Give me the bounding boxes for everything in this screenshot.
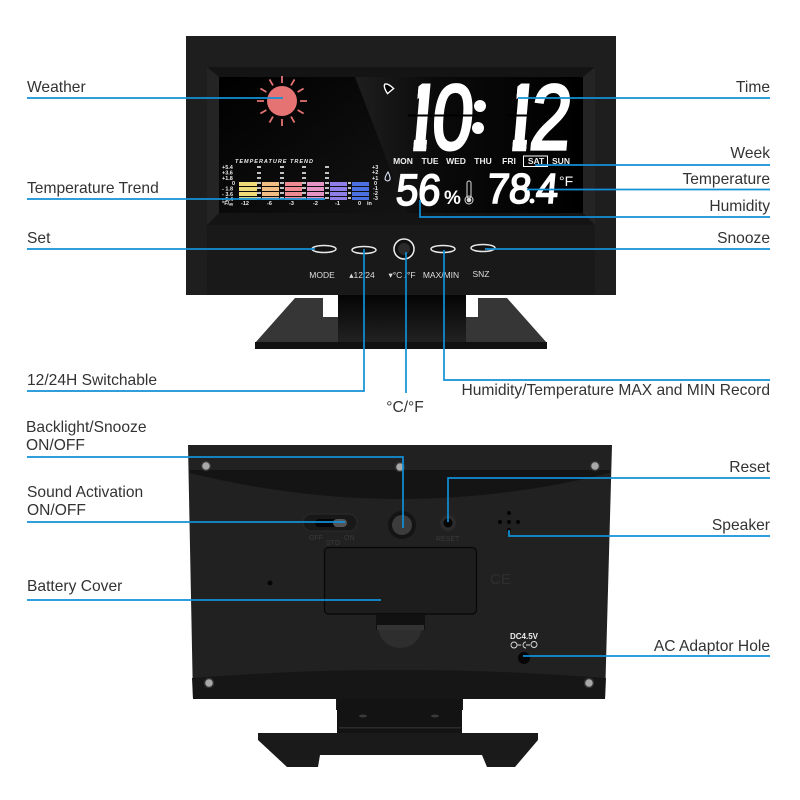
humidity reading: 5 xyxy=(394,166,421,214)
sound activation switch: OFF xyxy=(309,535,323,542)
week days: MON xyxy=(393,156,413,166)
stand: front view xyxy=(255,295,547,349)
reset hole xyxy=(436,515,460,543)
time digits xyxy=(408,83,570,152)
temperature trend chart: - 1.8 xyxy=(222,186,233,192)
icon: sun xyxy=(257,76,307,126)
rear screws xyxy=(202,462,600,688)
temperature reading xyxy=(485,165,573,212)
temperature trend chart: -6 xyxy=(267,201,272,207)
time digits: 1 xyxy=(396,65,446,169)
button captions: ▾°C /°F xyxy=(388,270,416,280)
time digits: 0 xyxy=(428,65,478,169)
button captions: MAX/MIN xyxy=(423,270,459,280)
sound activation switch: STD xyxy=(326,540,340,547)
callout: °C/°F: °C/°F xyxy=(386,399,424,416)
DC power marking xyxy=(510,632,539,648)
callout: Humidity/Temperature MAX and MIN Record: Humidity/Temperature MAX and MIN Record xyxy=(461,382,770,399)
callout: Temperature: Temperature xyxy=(682,171,770,188)
AC adaptor hole xyxy=(518,652,530,664)
temperature trend chart: +1.8 xyxy=(222,176,233,182)
temperature trend chart: +2 xyxy=(372,170,378,176)
temperature trend chart: -2 xyxy=(313,201,318,207)
callout: Week: Week xyxy=(730,145,770,162)
week days: FRI xyxy=(502,156,516,166)
humidity reading xyxy=(385,166,461,214)
callout: Sound Activation ON/OFF: ON/OFF xyxy=(27,502,86,519)
temperature trend chart xyxy=(222,159,378,207)
callout: Time: Time xyxy=(736,79,770,96)
callout: Weather: Weather xyxy=(27,79,86,96)
callout: Temperature Trend: Temperature Trend xyxy=(27,180,159,197)
button captions: MODE xyxy=(309,270,335,280)
week days: SAT xyxy=(528,156,545,166)
sound activation switch xyxy=(303,514,357,547)
time digits: 2 xyxy=(526,65,576,169)
callout: Reset xyxy=(448,459,771,522)
temperature trend chart: -3 xyxy=(289,201,294,207)
callout: Humidity/Temperature MAX and MIN Record xyxy=(444,250,770,399)
humidity reading: 6 xyxy=(416,166,443,214)
temperature reading: °F xyxy=(559,173,573,189)
callout: Sound Activation ON/OFF: Sound Activation xyxy=(27,484,143,501)
week days xyxy=(393,156,570,166)
DC power marking: DC4.5V xyxy=(510,632,539,641)
clock front body xyxy=(186,36,616,295)
icon: thermometer xyxy=(465,181,473,204)
temperature trend chart: - 3.6 xyxy=(222,192,233,198)
clock rear body xyxy=(188,445,612,699)
callout: Backlight/Snooze ON/OFF xyxy=(26,419,403,528)
temperature trend chart: -12 xyxy=(241,201,249,207)
callout: Set: Set xyxy=(27,230,51,247)
time digits: 1 xyxy=(495,65,545,169)
temperature reading: 4 xyxy=(534,165,561,212)
week days: SUN xyxy=(552,156,570,166)
callout: Humidity: Humidity xyxy=(709,198,770,215)
week days: THU xyxy=(474,156,492,166)
temperature reading: 8 xyxy=(507,165,534,212)
CE mark: CE xyxy=(490,571,511,588)
speaker holes xyxy=(498,511,520,532)
temperature trend chart: 0 xyxy=(232,181,235,187)
temperature trend chart: -1 xyxy=(335,201,340,207)
temperature trend chart: -3 xyxy=(373,196,378,202)
humidity reading: % xyxy=(444,188,461,209)
temperature trend chart: +5.4 xyxy=(222,165,234,171)
temperature trend chart: +3.6 xyxy=(222,170,233,176)
temperature trend chart: +3 xyxy=(372,165,378,171)
temperature trend chart: -1 xyxy=(373,186,378,192)
temperature trend chart: in xyxy=(367,201,373,207)
callout: Humidity xyxy=(420,198,770,217)
callout: Backlight/Snooze ON/OFF: ON/OFF xyxy=(26,437,85,454)
callout: AC Adaptor Hole: AC Adaptor Hole xyxy=(654,638,770,655)
button captions: SNZ xyxy=(472,269,490,279)
temperature trend chart: 0 xyxy=(358,201,361,207)
reset hole: RESET xyxy=(436,536,460,543)
control buttons xyxy=(312,239,495,259)
callout: Speaker: Speaker xyxy=(712,517,770,534)
callout: Backlight/Snooze ON/OFF: Backlight/Snooze xyxy=(26,419,146,436)
temperature trend chart: TEMPERATURE TREND xyxy=(235,159,314,165)
temperature trend chart: °F/ₐᵤ xyxy=(222,201,233,207)
week days: TUE xyxy=(422,156,439,166)
callout: Reset: Reset xyxy=(729,459,771,476)
temperature trend chart: - 5.4 xyxy=(222,197,234,203)
temperature trend chart: -2 xyxy=(373,191,378,197)
callout: Snooze: Snooze xyxy=(717,230,770,247)
battery cover xyxy=(324,548,476,648)
callout: 12/24H Switchable xyxy=(27,249,364,391)
week days: WED xyxy=(446,156,466,166)
button captions xyxy=(309,269,490,280)
temperature reading: 7 xyxy=(485,165,512,212)
temperature trend chart: +1 xyxy=(372,176,378,182)
backlight button xyxy=(388,511,416,539)
sound activation switch: ON xyxy=(344,535,354,542)
icon: alarm bell xyxy=(382,82,394,94)
button captions: ▴12/24 xyxy=(349,270,375,280)
side hole xyxy=(268,580,272,586)
callout: Sound Activation ON/OFF xyxy=(27,484,345,522)
callout: Speaker xyxy=(509,517,770,536)
callout: Battery Cover: Battery Cover xyxy=(27,578,122,595)
callout: 12/24H Switchable: 12/24H Switchable xyxy=(27,372,157,389)
stand: rear view xyxy=(258,675,538,767)
temperature trend chart: 0 xyxy=(374,181,377,187)
LCD screen xyxy=(219,77,583,213)
